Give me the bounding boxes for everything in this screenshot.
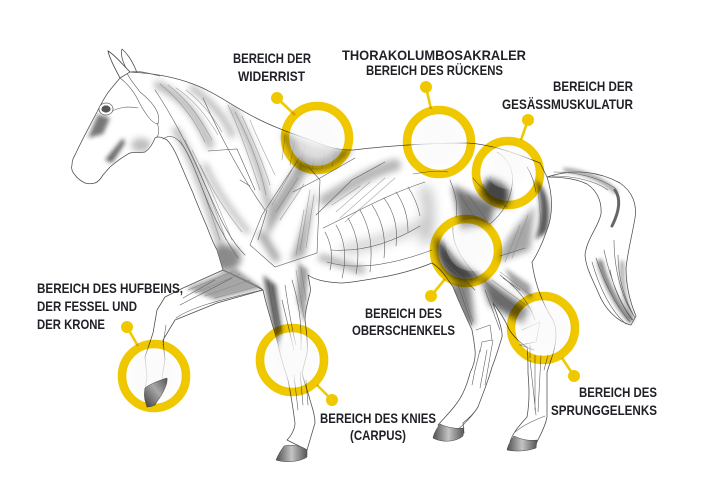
upper back and flank shading [322,165,429,270]
label: Rücken: THORAKOLUMBOSAKRALER [342,48,526,63]
foreleg muscle shading [186,262,308,355]
label: Knie: BEREICH DES KNIES [320,411,436,426]
horse illustration [72,49,636,462]
ring: Huf [121,321,186,408]
ear, far side [121,49,137,74]
ring: Sprunggelenk [511,296,580,382]
face shading [88,114,151,163]
gluteal and thigh shading [436,178,549,325]
neck muscle shading [158,85,268,250]
label: Gesässmuskulatur: BEREICH DER [553,79,633,94]
label: Sprunggelenk: BEREICH DES [579,385,657,400]
label: Sprunggelenk: SPRUNGGELENKS [551,403,657,418]
withers shading [282,132,352,172]
label: Widerrist: WIDERRIST [238,69,305,84]
ring: Rücken [407,81,471,174]
hooves [276,424,537,462]
ear, near side [108,51,130,78]
label: Huf: DER FESSEL UND [37,299,137,314]
neck and body fine fibres [160,84,546,345]
shoulder shading [262,160,316,262]
label: Oberschenkel: BEREICH DES [365,306,442,321]
ring: Knie [260,328,338,406]
eye [99,103,113,115]
label: Huf: BEREICH DES HUFBEINS, [37,281,183,296]
label: Oberschenkel: OBERSCHENKELS [352,323,455,338]
ring: Oberschenkel [425,219,498,302]
label: Rücken: BEREICH DES RÜCKENS [366,62,503,78]
chest muscle [211,245,241,271]
label: Widerrist: BEREICH DER [233,51,311,66]
horse body and head silhouette [72,51,556,450]
label: Knie: (CARPUS) [350,428,406,443]
muscle contour lines [110,71,548,440]
hoof, raised foreleg [144,378,167,407]
label: Huf: DER KRONE [37,317,105,332]
ring: Widerrist [271,92,349,170]
raised foreleg [145,270,263,407]
label: Gesässmuskulatur: GESÄSSMUSKULATUR [502,96,633,112]
muscle shading [88,84,549,355]
ring: Gesässmuskulatur [476,114,540,205]
tail [547,170,636,325]
